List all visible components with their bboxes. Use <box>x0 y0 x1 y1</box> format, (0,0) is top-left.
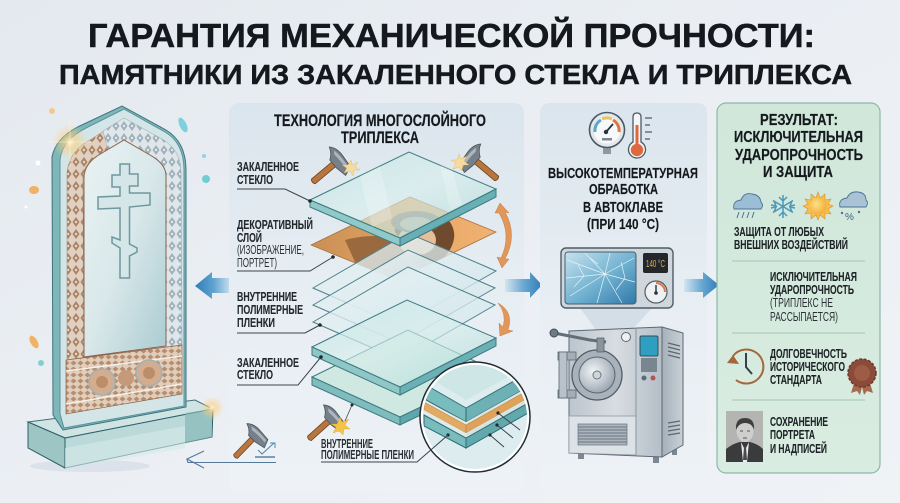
autoclave machine <box>550 327 683 463</box>
spark top right <box>451 154 469 171</box>
curved arrow down <box>498 303 513 336</box>
label: inner polymer films: ПОЛИМЕРНЫЕ ПЛЕНКИ <box>321 448 414 462</box>
label: decorative layer: ПОРТРЕТ) <box>237 256 277 270</box>
heading: result: И ЗАЩИТА <box>763 164 833 181</box>
hammer bottom <box>298 402 348 451</box>
monument window <box>84 140 166 357</box>
heading: result <box>734 112 863 181</box>
text: durability: ИСТОРИЧЕСКОГО <box>770 360 845 374</box>
heading: triplex technology <box>274 111 486 147</box>
title: ГАРАНТИЯ МЕХАНИЧЕСКОЙ ПРОЧНОСТИ: <box>88 16 815 54</box>
title: ПАМЯТНИКИ ИЗ ЗАКАЛЕННОГО СТЕКЛА И ТРИПЛЕКСА <box>59 59 852 90</box>
icon: rain cloud <box>734 194 762 218</box>
door hinges <box>558 352 576 360</box>
text: impact strength <box>770 270 857 324</box>
curved double arrow <box>495 203 512 268</box>
label: decorative layer: (ИЗОБРАЖЕНИЕ, <box>237 243 304 257</box>
polymer films <box>313 233 496 360</box>
hammer top right <box>456 141 508 192</box>
cracked glass screen <box>565 252 636 304</box>
zoom wedge <box>580 308 652 330</box>
heading: autoclave <box>548 166 698 233</box>
heading: result: УДАРОПРОЧНОСТЬ <box>735 147 863 164</box>
monument base <box>28 400 213 470</box>
label: tempered glass 1 <box>237 159 312 203</box>
label: tempered glass 1: СТЕКЛО <box>237 172 273 187</box>
text: protection: ВНЕШНИХ ВОЗДЕЙСТВИЙ <box>734 237 848 252</box>
control panel <box>640 336 658 356</box>
arrow: center to autoclave <box>505 272 542 298</box>
label: tempered glass 2: ЗАКАЛЕННОЕ <box>237 355 299 370</box>
heading: autoclave: (ПРИ 140 °C) <box>587 217 659 233</box>
label: inner polymer films: ВНУТРЕННИЕ <box>321 437 373 451</box>
label: polymer films <box>237 289 322 333</box>
label: tempered glass 2 <box>237 355 323 385</box>
heading: result: РЕЗУЛЬТАТ: <box>760 112 838 129</box>
spark bottom <box>331 417 350 435</box>
door lever <box>554 333 606 342</box>
monument front face <box>60 109 184 428</box>
magnifier cross-section <box>419 361 531 473</box>
text: portrait preservation: СОХРАНЕНИЕ <box>770 415 828 429</box>
arrow: center panel to monument <box>195 272 232 299</box>
heading: autoclave: ОБРАБОТКА <box>589 182 658 198</box>
tempered glass bottom <box>312 330 496 425</box>
heading: autoclave: ВЫСОКОТЕМПЕРАТУРНАЯ <box>548 166 698 182</box>
door <box>572 350 622 400</box>
icon: clock with arrow <box>727 350 763 384</box>
tempered glass top <box>310 152 496 246</box>
ornamental lower band <box>66 345 182 414</box>
panel: autoclave <box>540 103 707 491</box>
icon: thermometer <box>629 113 652 158</box>
title <box>59 16 852 90</box>
vents <box>668 343 680 435</box>
label: inner polymer films <box>321 435 448 462</box>
text: protection <box>734 225 848 252</box>
panel: result <box>717 103 880 473</box>
small gauge <box>645 281 667 303</box>
hammer top left <box>302 144 354 195</box>
label: polymer films: ВНУТРЕННИЕ <box>237 289 297 304</box>
monument: glass headstone with cross <box>24 106 224 472</box>
label: tempered glass 1: ЗАКАЛЕННОЕ <box>237 159 299 174</box>
text: impact strength: (ТРИПЛЕКС НЕ <box>770 296 833 310</box>
text: impact strength: ИСКЛЮЧИТЕЛЬНАЯ <box>770 270 857 284</box>
icon: sun <box>803 192 833 220</box>
ornament border, warm side <box>67 127 118 363</box>
text: impact strength: РАССЫПАЕТСЯ) <box>770 310 838 324</box>
label: tempered glass 2: СТЕКЛО <box>237 367 273 382</box>
heading: triplex technology: ТРИПЛЕКСА <box>341 128 419 147</box>
label: decorative layer: СЛОЙ <box>237 230 262 245</box>
cross <box>98 164 150 278</box>
icon: humidity cloud: % <box>845 212 854 223</box>
decorative portrait layer <box>311 197 496 285</box>
glare and sparkles <box>24 108 224 420</box>
tempered glass upper <box>312 300 496 395</box>
monument slab edge <box>52 106 186 430</box>
icon: wax seal <box>848 359 876 395</box>
text: portrait preservation: ПОРТРЕТА <box>770 428 815 442</box>
text: durability <box>770 347 847 387</box>
display unit <box>561 248 673 308</box>
impact test icon: hammer and thin arrow <box>187 420 276 468</box>
spark top left <box>342 160 360 176</box>
text: portrait preservation: И НАДПИСЕЙ <box>770 441 827 456</box>
portrait photo <box>726 411 763 462</box>
ornament border, cool side <box>103 118 182 349</box>
icon: snowflake <box>771 195 795 218</box>
icon: humidity cloud <box>840 192 868 223</box>
heading: triplex technology: ТЕХНОЛОГИЯ МНОГОСЛОЙНОГО <box>274 111 486 130</box>
icon: pressure gauge <box>590 112 624 154</box>
label: decorative layer <box>237 217 335 271</box>
label: polymer films: ПОЛИМЕРНЫЕ <box>237 302 303 317</box>
text: portrait preservation <box>770 415 828 456</box>
digital readout: 140 °C <box>646 259 665 270</box>
text: protection: ЗАЩИТА ОТ ЛЮБЫХ <box>734 225 824 239</box>
panel: triplex technology <box>229 103 530 493</box>
arrow: autoclave to result <box>684 272 719 298</box>
text: durability: ДОЛГОВЕЧНОСТЬ <box>770 347 847 361</box>
heading: autoclave: В АВТОКЛАВЕ <box>583 200 663 216</box>
label: polymer films: ПЛЕНКИ <box>237 315 275 330</box>
text: impact strength: УДАРОПРОЧНОСТЬ <box>770 283 854 297</box>
heading: result: ИСКЛЮЧИТЕЛЬНАЯ <box>734 129 863 146</box>
text: durability: СТАНДАРТА <box>770 373 822 387</box>
label: decorative layer: ДЕКОРАТИВНЫЙ <box>237 217 313 232</box>
